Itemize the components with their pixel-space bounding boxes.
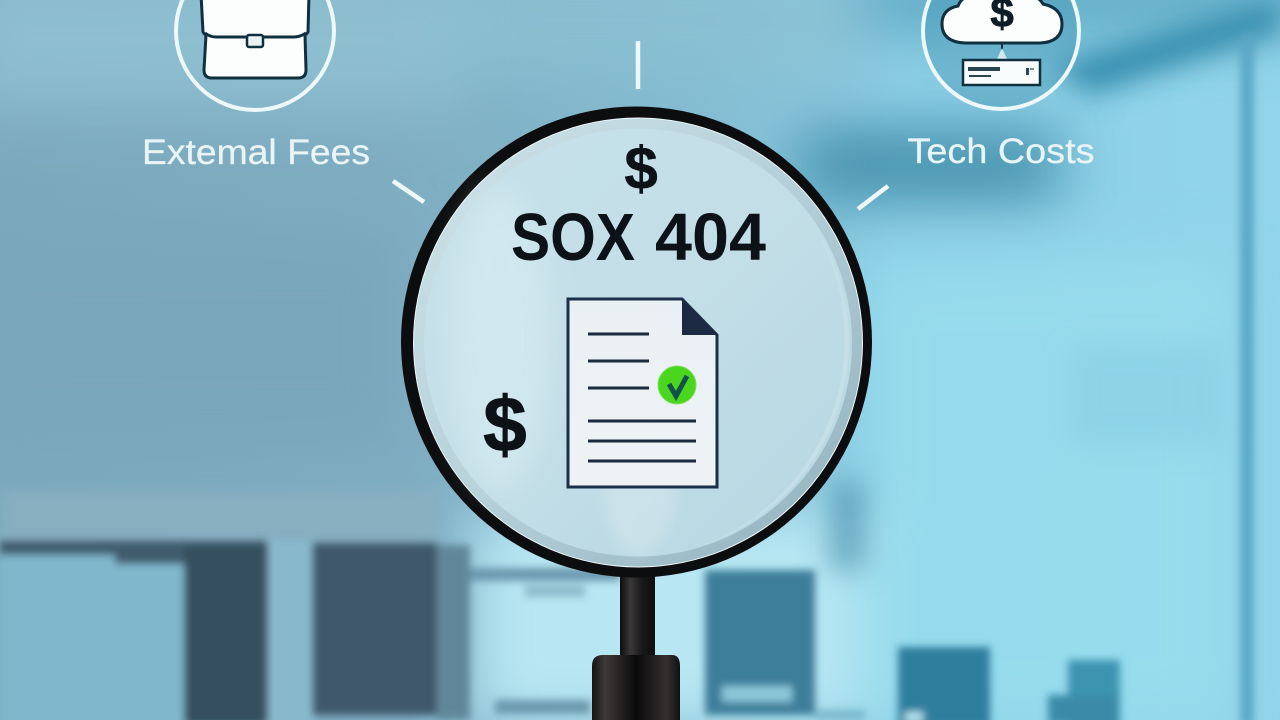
document folded corner: [682, 299, 717, 335]
title: SOX 404: [511, 200, 766, 275]
magnifier lens: [413, 118, 863, 568]
magnifier handle grip: [592, 655, 680, 720]
connector tick: right: [858, 186, 888, 209]
icon: briefcase in circle: [176, 0, 334, 110]
briefcase clasp: [247, 35, 263, 47]
magnifying glass: [401, 106, 872, 720]
green check badge: [658, 366, 696, 404]
label: External Fees: Extemal Fees: [142, 133, 370, 172]
title: SOX 404: SOX: [511, 200, 635, 275]
magnifier rim: [401, 106, 872, 578]
label: Tech Costs: Tech Costs: [908, 132, 1094, 171]
dollar sign: left: $: [483, 380, 527, 468]
title: SOX 404: 404: [655, 200, 766, 275]
document icon: [568, 299, 717, 487]
dollar sign: top: $: [624, 135, 658, 202]
connector tick: left: [393, 181, 424, 202]
icon: cloud with dollar and server in circle: [923, 0, 1079, 109]
connector tick: top: [636, 41, 640, 89]
magnifier handle stem: [620, 570, 655, 660]
